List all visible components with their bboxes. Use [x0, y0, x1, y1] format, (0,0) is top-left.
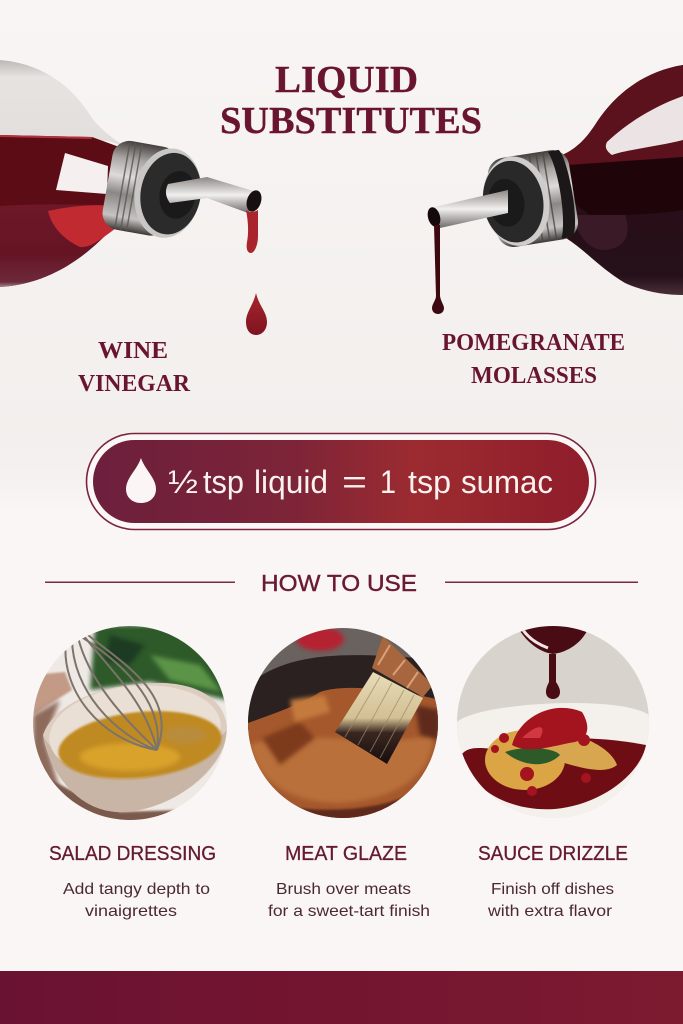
card text: meat glaze	[268, 843, 430, 920]
card text: salad dressing: SALAD DRESSING	[49, 843, 216, 865]
photo: meat glaze	[248, 625, 440, 825]
title	[220, 59, 482, 142]
drip from left spout	[246, 210, 258, 253]
photo: salad dressing	[33, 625, 227, 830]
footer band	[0, 971, 683, 1024]
title: LIQUID	[275, 59, 418, 101]
card text: salad dressing	[49, 843, 216, 920]
label: wine vinegar: VINEGAR	[78, 371, 191, 397]
title: SUBSTITUTES	[220, 100, 482, 142]
card text: meat glaze: MEAT GLAZE	[285, 843, 407, 865]
label: pomegranate molasses: POMEGRANATE	[442, 330, 625, 356]
ratio pill	[86, 434, 596, 530]
thin drip from right spout	[432, 225, 444, 314]
icon: water drop	[126, 458, 156, 503]
label: wine vinegar: WINE	[98, 338, 168, 364]
how to use heading: HOW TO USE	[261, 570, 417, 596]
card text: meat glaze: Brush over meats	[276, 881, 411, 898]
label: pomegranate molasses	[442, 330, 625, 389]
ratio text	[168, 464, 553, 500]
card text: sauce drizzle	[478, 843, 628, 920]
left wine vinegar bottle	[0, 60, 264, 287]
label: wine vinegar	[78, 338, 191, 397]
photo: sauce drizzle	[457, 624, 649, 822]
falling wine drop	[246, 293, 267, 335]
card text: salad dressing: vinaigrettes	[85, 903, 177, 920]
ratio text: liquid	[254, 464, 328, 500]
label: pomegranate molasses: MOLASSES	[471, 363, 597, 389]
ratio text: sumac	[461, 464, 553, 500]
card text: meat glaze: for a sweet-tart finish	[268, 903, 430, 920]
card text: sauce drizzle: Finish off dishes	[491, 881, 614, 898]
card text: salad dressing: Add tangy depth to	[63, 881, 210, 898]
card text: sauce drizzle: with extra flavor	[487, 903, 613, 920]
ratio text: tsp	[203, 464, 244, 500]
ratio text: ½	[168, 464, 198, 500]
ratio text: =	[342, 464, 367, 500]
right pomegranate molasses bottle	[426, 65, 683, 295]
card text: sauce drizzle: SAUCE DRIZZLE	[478, 843, 628, 865]
ratio text: 1	[380, 464, 396, 500]
ratio text: tsp	[408, 464, 451, 500]
